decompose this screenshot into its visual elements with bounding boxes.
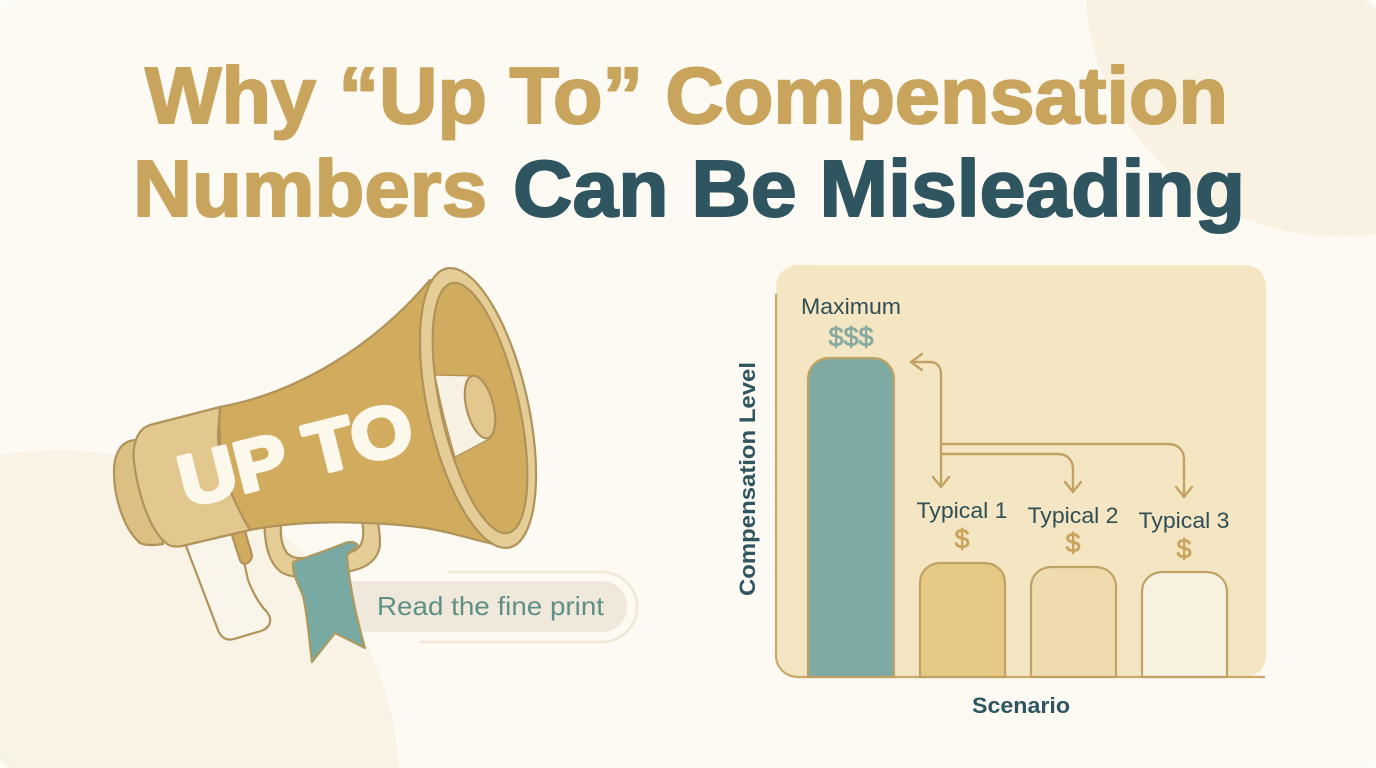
dollar signs: $$$ xyxy=(828,322,874,352)
title: Numbers xyxy=(133,144,487,233)
dollar signs: $ xyxy=(954,524,970,554)
icon: megaphone xyxy=(114,258,558,662)
callout: read the fine print: Read the fine print xyxy=(377,591,605,621)
bar labels: Typical 3 xyxy=(1138,508,1230,533)
bar: maximum xyxy=(808,358,894,677)
horn body xyxy=(219,280,510,547)
bar labels: Typical 1 xyxy=(916,498,1008,523)
horn mouth xyxy=(414,275,546,541)
bar labels: Maximum xyxy=(801,294,901,319)
chart: compensation levels xyxy=(735,265,1266,718)
bar: typical 1 xyxy=(920,563,1005,677)
axes xyxy=(776,294,1265,677)
speaker cylinder xyxy=(435,375,491,457)
bar: typical 3 xyxy=(1142,572,1227,677)
ribbon xyxy=(293,542,365,662)
x axis title: Scenario xyxy=(972,693,1070,718)
megaphone label: UP TO xyxy=(171,387,421,523)
horn rim xyxy=(398,258,558,558)
light band xyxy=(134,407,250,547)
back cap xyxy=(114,436,163,545)
megaphone strap ring xyxy=(264,515,380,577)
dollar signs: $ xyxy=(1176,534,1192,564)
dollar signs xyxy=(828,322,1192,564)
dollar signs: $ xyxy=(1065,528,1081,558)
bar labels xyxy=(801,294,1230,533)
title: Can Be Misleading xyxy=(513,144,1245,233)
bar labels: Typical 2 xyxy=(1028,503,1118,528)
chart panel xyxy=(776,265,1266,677)
speaker end xyxy=(459,373,501,441)
title xyxy=(133,51,1245,233)
y axis title: Compensation Level xyxy=(735,362,760,596)
megaphone handle xyxy=(178,525,270,640)
title: Why “Up To” Compensation xyxy=(145,51,1228,140)
megaphone trigger xyxy=(231,528,252,564)
arrows xyxy=(911,354,1192,497)
callout: read the fine print xyxy=(340,572,637,642)
bar: typical 2 xyxy=(1031,567,1116,677)
